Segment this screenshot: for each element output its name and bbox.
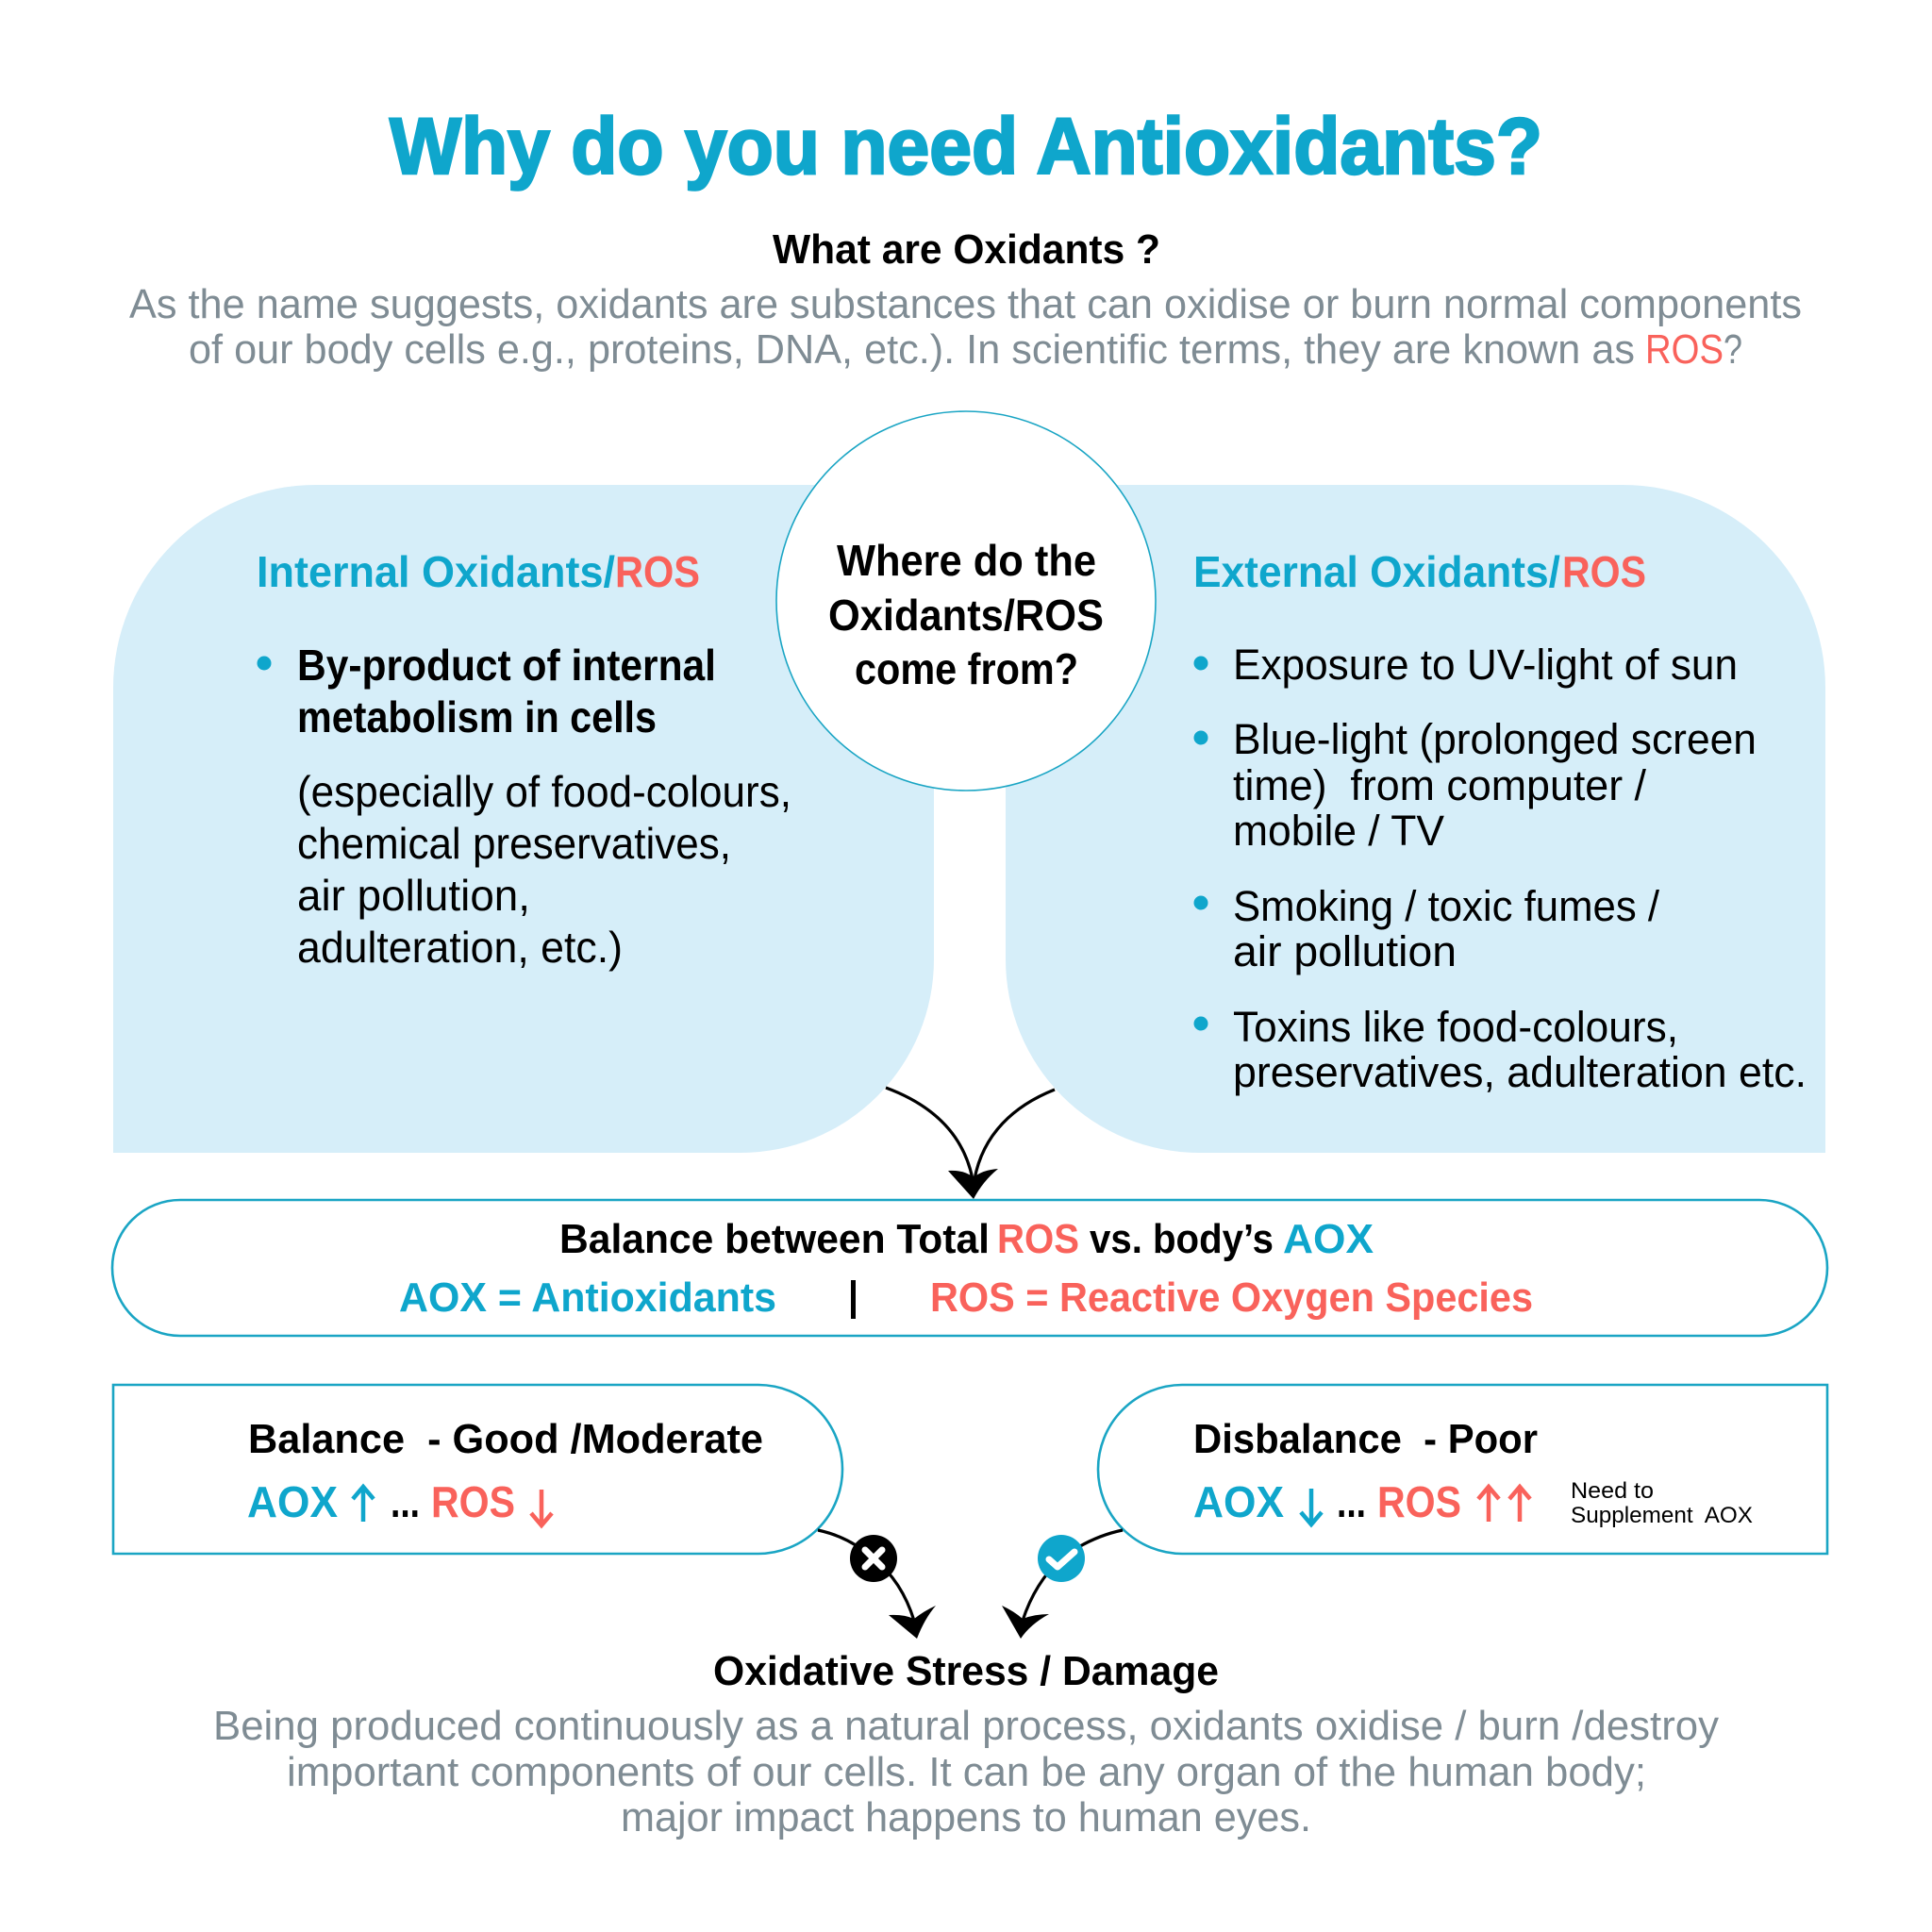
arrow: merging sources into balance: [886, 1088, 1055, 1199]
icon: check: [1038, 1535, 1085, 1582]
internal detail text: adulteration, etc.): [297, 923, 623, 972]
panel: disbalance poor: [1098, 1385, 1827, 1554]
external list text: Toxins like food-colours,: [1233, 1003, 1678, 1051]
external list text: [1233, 641, 1807, 1096]
internal bold text: [297, 641, 716, 741]
panel: external oxidants: [1006, 485, 1825, 1153]
intro paragraph: [129, 281, 1802, 373]
intro paragraph: ?: [1724, 326, 1742, 373]
external list text: Smoking / toxic fumes /: [1233, 882, 1659, 930]
balance good formula: AOX: [247, 1477, 338, 1526]
internal detail text: chemical preservatives,: [297, 819, 731, 868]
balance good formula: ...: [391, 1477, 420, 1526]
intro paragraph: As the name suggests, oxidants are substances that can oxidise or burn normal components: [129, 281, 1802, 327]
external heading: ROS: [1562, 547, 1646, 596]
center circle: where do oxidants come from: Where do the: [837, 536, 1096, 585]
closing paragraph: major impact happens to human eyes.: [621, 1794, 1311, 1840]
panel: balance definition pill: [112, 1200, 1827, 1336]
closing paragraph: [213, 1703, 1719, 1840]
closing paragraph: Being produced continuously as a natural process, oxidants oxidise / burn /destroy: [213, 1703, 1719, 1749]
supplement note: [1571, 1478, 1753, 1528]
divider bar: [851, 1280, 856, 1319]
internal bold text: metabolism in cells: [297, 692, 657, 741]
balance heading: vs. body’s: [1090, 1216, 1274, 1262]
external list text: time) from computer /: [1233, 761, 1646, 809]
supplement note: Need to: [1571, 1478, 1654, 1504]
internal detail text: (especially of food-colours,: [297, 767, 791, 816]
disbalance formula: ROS: [1377, 1477, 1461, 1526]
closing paragraph: important components of our cells. It can be any organ of the human body;: [287, 1749, 1646, 1795]
center circle: where do oxidants come from: [776, 411, 1156, 791]
external list text: mobile / TV: [1233, 807, 1444, 855]
definition: AOX: AOX = Antioxidants: [399, 1274, 776, 1321]
title: Why do you need Antioxidants?: [390, 102, 1542, 191]
internal bullet: [257, 657, 272, 670]
disbalance formula: ...: [1337, 1477, 1366, 1526]
balance heading: AOX: [1283, 1216, 1374, 1262]
heading: what are oxidants: What are Oxidants ?: [773, 226, 1160, 273]
external heading: External Oxidants/: [1193, 547, 1560, 596]
internal heading: ROS: [615, 547, 700, 596]
balance heading: ROS: [997, 1216, 1079, 1262]
intro paragraph: of our body cells e.g., proteins, DNA, etc.). In scientific terms, they are known as: [189, 326, 1635, 373]
balance good formula: ROS: [431, 1477, 515, 1526]
internal detail text: air pollution,: [297, 871, 530, 920]
external list text: Exposure to UV-light of sun: [1233, 641, 1738, 689]
center circle: where do oxidants come from: come from?: [855, 644, 1078, 693]
disbalance heading: Disbalance - Poor: [1193, 1416, 1538, 1462]
balance good heading: Balance - Good /Moderate: [248, 1416, 763, 1462]
internal heading: Internal Oxidants/: [257, 547, 615, 596]
disbalance formula: AOX: [1193, 1477, 1284, 1526]
arrow: disbalance to oxidative stress: [1002, 1530, 1123, 1639]
center circle: where do oxidants come from: Oxidants/ROS: [828, 591, 1104, 640]
external bullets: [1194, 657, 1208, 1030]
panel: internal oxidants: [113, 485, 934, 1153]
arrow: balance to oxidative stress, blocked: [818, 1530, 936, 1639]
internal bold text: By-product of internal: [297, 641, 716, 690]
panel: balance good: [113, 1385, 842, 1554]
disbalance formula: [1193, 1477, 1530, 1526]
balance heading: [559, 1216, 1374, 1262]
external list text: air pollution: [1233, 927, 1457, 975]
balance good formula: [247, 1477, 552, 1526]
internal detail text: [297, 767, 791, 972]
intro paragraph: ROS: [1645, 326, 1724, 373]
balance heading: Balance between Total: [559, 1216, 990, 1262]
external list text: Blue-light (prolonged screen: [1233, 715, 1757, 763]
definition: ROS: ROS = Reactive Oxygen Species: [930, 1274, 1533, 1321]
icon: cross: [850, 1535, 897, 1582]
heading: oxidative stress: Oxidative Stress / Damage: [713, 1648, 1219, 1694]
external list text: preservatives, adulteration etc.: [1233, 1048, 1807, 1096]
supplement note: Supplement AOX: [1571, 1503, 1753, 1528]
